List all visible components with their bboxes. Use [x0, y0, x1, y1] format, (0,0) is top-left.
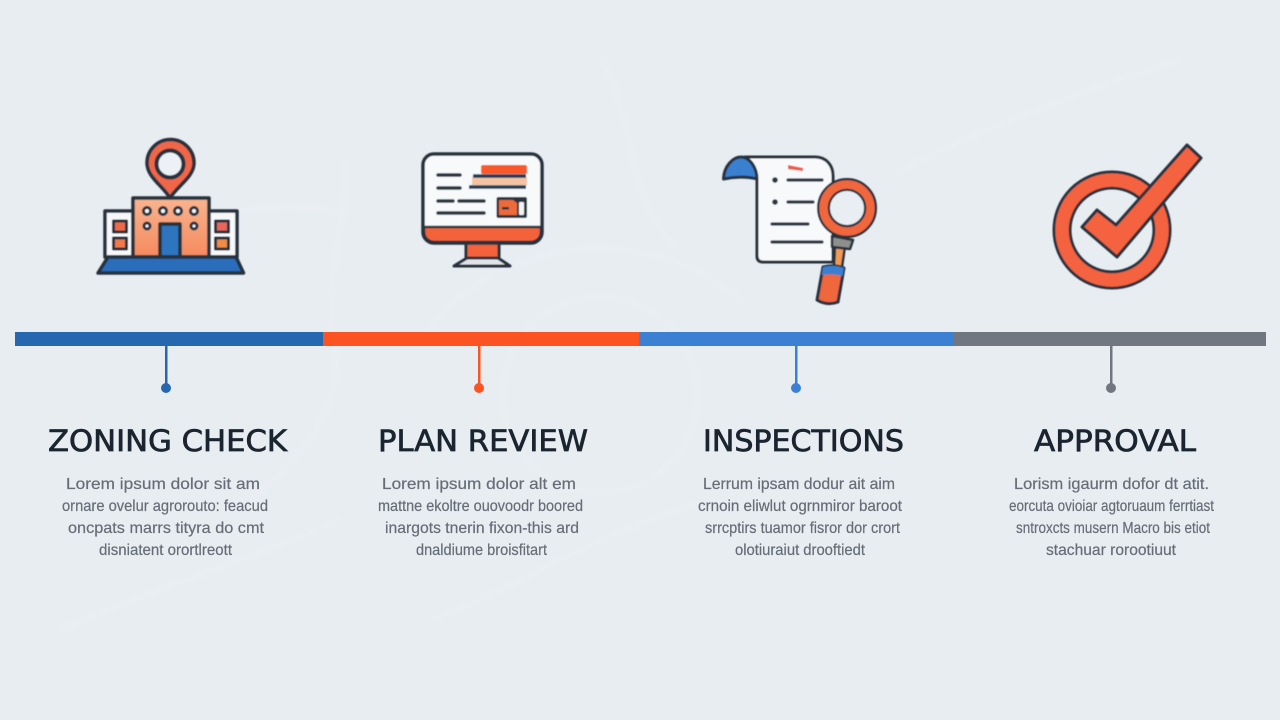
- step 1 body text: ornare ovelur agrorouto: feacud: [62, 498, 268, 515]
- side wing right: [208, 211, 237, 257]
- connector 1: [161, 346, 171, 393]
- handle grip: [817, 266, 844, 304]
- step 3 body text: olotiuraiut drooftiedt: [735, 542, 866, 559]
- connector 3: [791, 346, 801, 393]
- paper sheet: [745, 157, 833, 262]
- step 2 heading: PLAN REVIEW: [378, 424, 588, 458]
- step 3 body text: Lerrum ipsam dodur ait aim: [703, 476, 895, 493]
- step 2 body text: Lorem ipsum dolor alt em: [382, 476, 576, 493]
- bottom band: [424, 227, 541, 242]
- ring outline: [1062, 180, 1162, 280]
- segment 3: [639, 332, 953, 346]
- step 4 body text: [1009, 476, 1214, 559]
- handle neck: [834, 246, 845, 267]
- mini card details: [499, 200, 524, 215]
- heading lines: [469, 176, 526, 187]
- step 4 body text: stachuar rorootiuut: [1046, 542, 1177, 559]
- step 2 body text: [378, 476, 583, 559]
- step 2 body text: inargots tnerin fixon-this ard: [385, 520, 579, 537]
- step 3 body text: [698, 476, 903, 559]
- step 4 body text: Lorism igaurm dofor dt atit.: [1014, 476, 1209, 493]
- timeline bar: [15, 332, 1266, 346]
- orange header: [481, 165, 527, 174]
- icon: document with magnifying glass: [724, 157, 870, 304]
- step 3 heading: INSPECTIONS: [703, 424, 904, 458]
- icon: zoning building with location pin: [98, 140, 244, 273]
- screen: [423, 154, 542, 243]
- side wing left: [105, 211, 133, 257]
- bullet dots: [772, 177, 778, 205]
- step 4 body text: sntroxcts musern Macro bis etiot: [1016, 520, 1210, 537]
- step 2 body text: dnaldiume broisfitart: [416, 542, 547, 559]
- stand base: [454, 258, 510, 266]
- step 3 body text: crnoin eliwlut ogrnmiror baroot: [698, 498, 903, 515]
- step 4 body text: eorcuta ovioiar agtoruaum ferrtiast: [1009, 498, 1214, 515]
- step 4 heading: APPROVAL: [1034, 424, 1196, 458]
- step 1 body text: [62, 476, 268, 559]
- building round windows: [144, 208, 198, 229]
- location pin: [147, 140, 194, 198]
- connector 4: [1106, 346, 1116, 393]
- ring colour: [1062, 180, 1162, 280]
- pin hole: [156, 150, 184, 178]
- step 1 body text: oncpats marrs tityra do cmt: [68, 520, 265, 537]
- connector 2: [474, 346, 484, 393]
- segment 4: [953, 332, 1266, 346]
- base platform: [98, 257, 244, 273]
- red mark: [788, 165, 803, 171]
- wing windows: [114, 221, 228, 249]
- mini card: [496, 197, 527, 218]
- step 1 body text: Lorem ipsum dolor sit am: [66, 476, 260, 493]
- document lines: [772, 180, 822, 242]
- icon: computer monitor with plans: [423, 154, 542, 266]
- main building: [133, 198, 209, 257]
- grip cap: [822, 266, 844, 276]
- peach strip: [472, 177, 527, 185]
- icon: approval check mark: [1062, 145, 1201, 280]
- step 1 body text: disniatent orortlreott: [99, 542, 233, 559]
- segment 2: [323, 332, 639, 346]
- step 2 body text: mattne ekoltre ouovoodr boored: [378, 498, 583, 515]
- segment 1: [15, 332, 323, 346]
- text lines: [438, 175, 484, 213]
- check: [1082, 145, 1201, 257]
- step 3 body text: srrcptirs tuamor fisror dor crort: [705, 520, 901, 537]
- door: [160, 224, 180, 257]
- step 1 heading: ZONING CHECK: [48, 424, 288, 458]
- blue curl: [724, 157, 757, 179]
- handle collar: [832, 236, 853, 249]
- stand neck: [466, 243, 499, 258]
- lens ring: [824, 184, 870, 232]
- lens ring colour: [824, 184, 870, 232]
